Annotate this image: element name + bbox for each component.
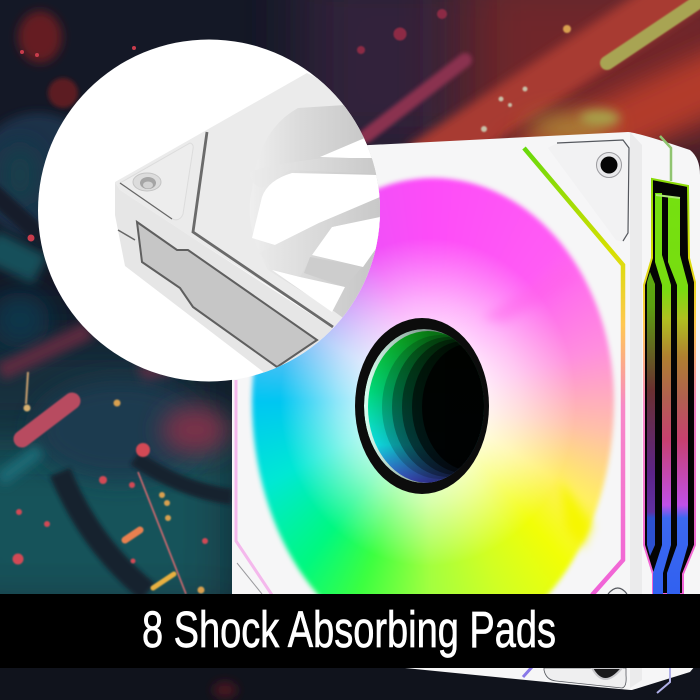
lower left screw outline (237, 563, 262, 594)
screw hole (133, 173, 161, 191)
fan window top (320, 138, 372, 158)
side notch (118, 230, 135, 240)
fan window bottom (272, 270, 345, 312)
fan blade 2 (312, 197, 380, 255)
hub: infinity mirror (355, 318, 489, 494)
fan RGB ring (252, 178, 614, 652)
neon line right (524, 148, 623, 595)
top right corner pad (548, 140, 629, 242)
fan strut (304, 257, 319, 278)
frame top face (115, 73, 380, 328)
neon line left (236, 380, 272, 595)
inner wall (280, 105, 380, 318)
product: RGB fan body (232, 132, 700, 694)
fan blade highlight (482, 263, 578, 322)
yellow blade highlight (560, 480, 592, 548)
bottom corner details (523, 667, 670, 693)
fan neon lines, vents and screw pads (234, 135, 696, 694)
caption bar (0, 594, 700, 668)
bottom right screw (top) (608, 588, 627, 594)
fan blade 1 (354, 158, 376, 173)
fan window left (252, 173, 380, 245)
side face (115, 182, 332, 372)
caption text: 8 Shock Absorbing Pads (142, 601, 556, 658)
side vent strip (644, 179, 695, 594)
fan window right (312, 216, 380, 267)
zoom circle: close-up of corner pad (38, 40, 380, 382)
top seam line (660, 136, 671, 181)
side recessed panel (137, 222, 317, 367)
fan inner glow (280, 238, 576, 566)
frame groove (193, 132, 333, 327)
corner pad (120, 143, 193, 220)
